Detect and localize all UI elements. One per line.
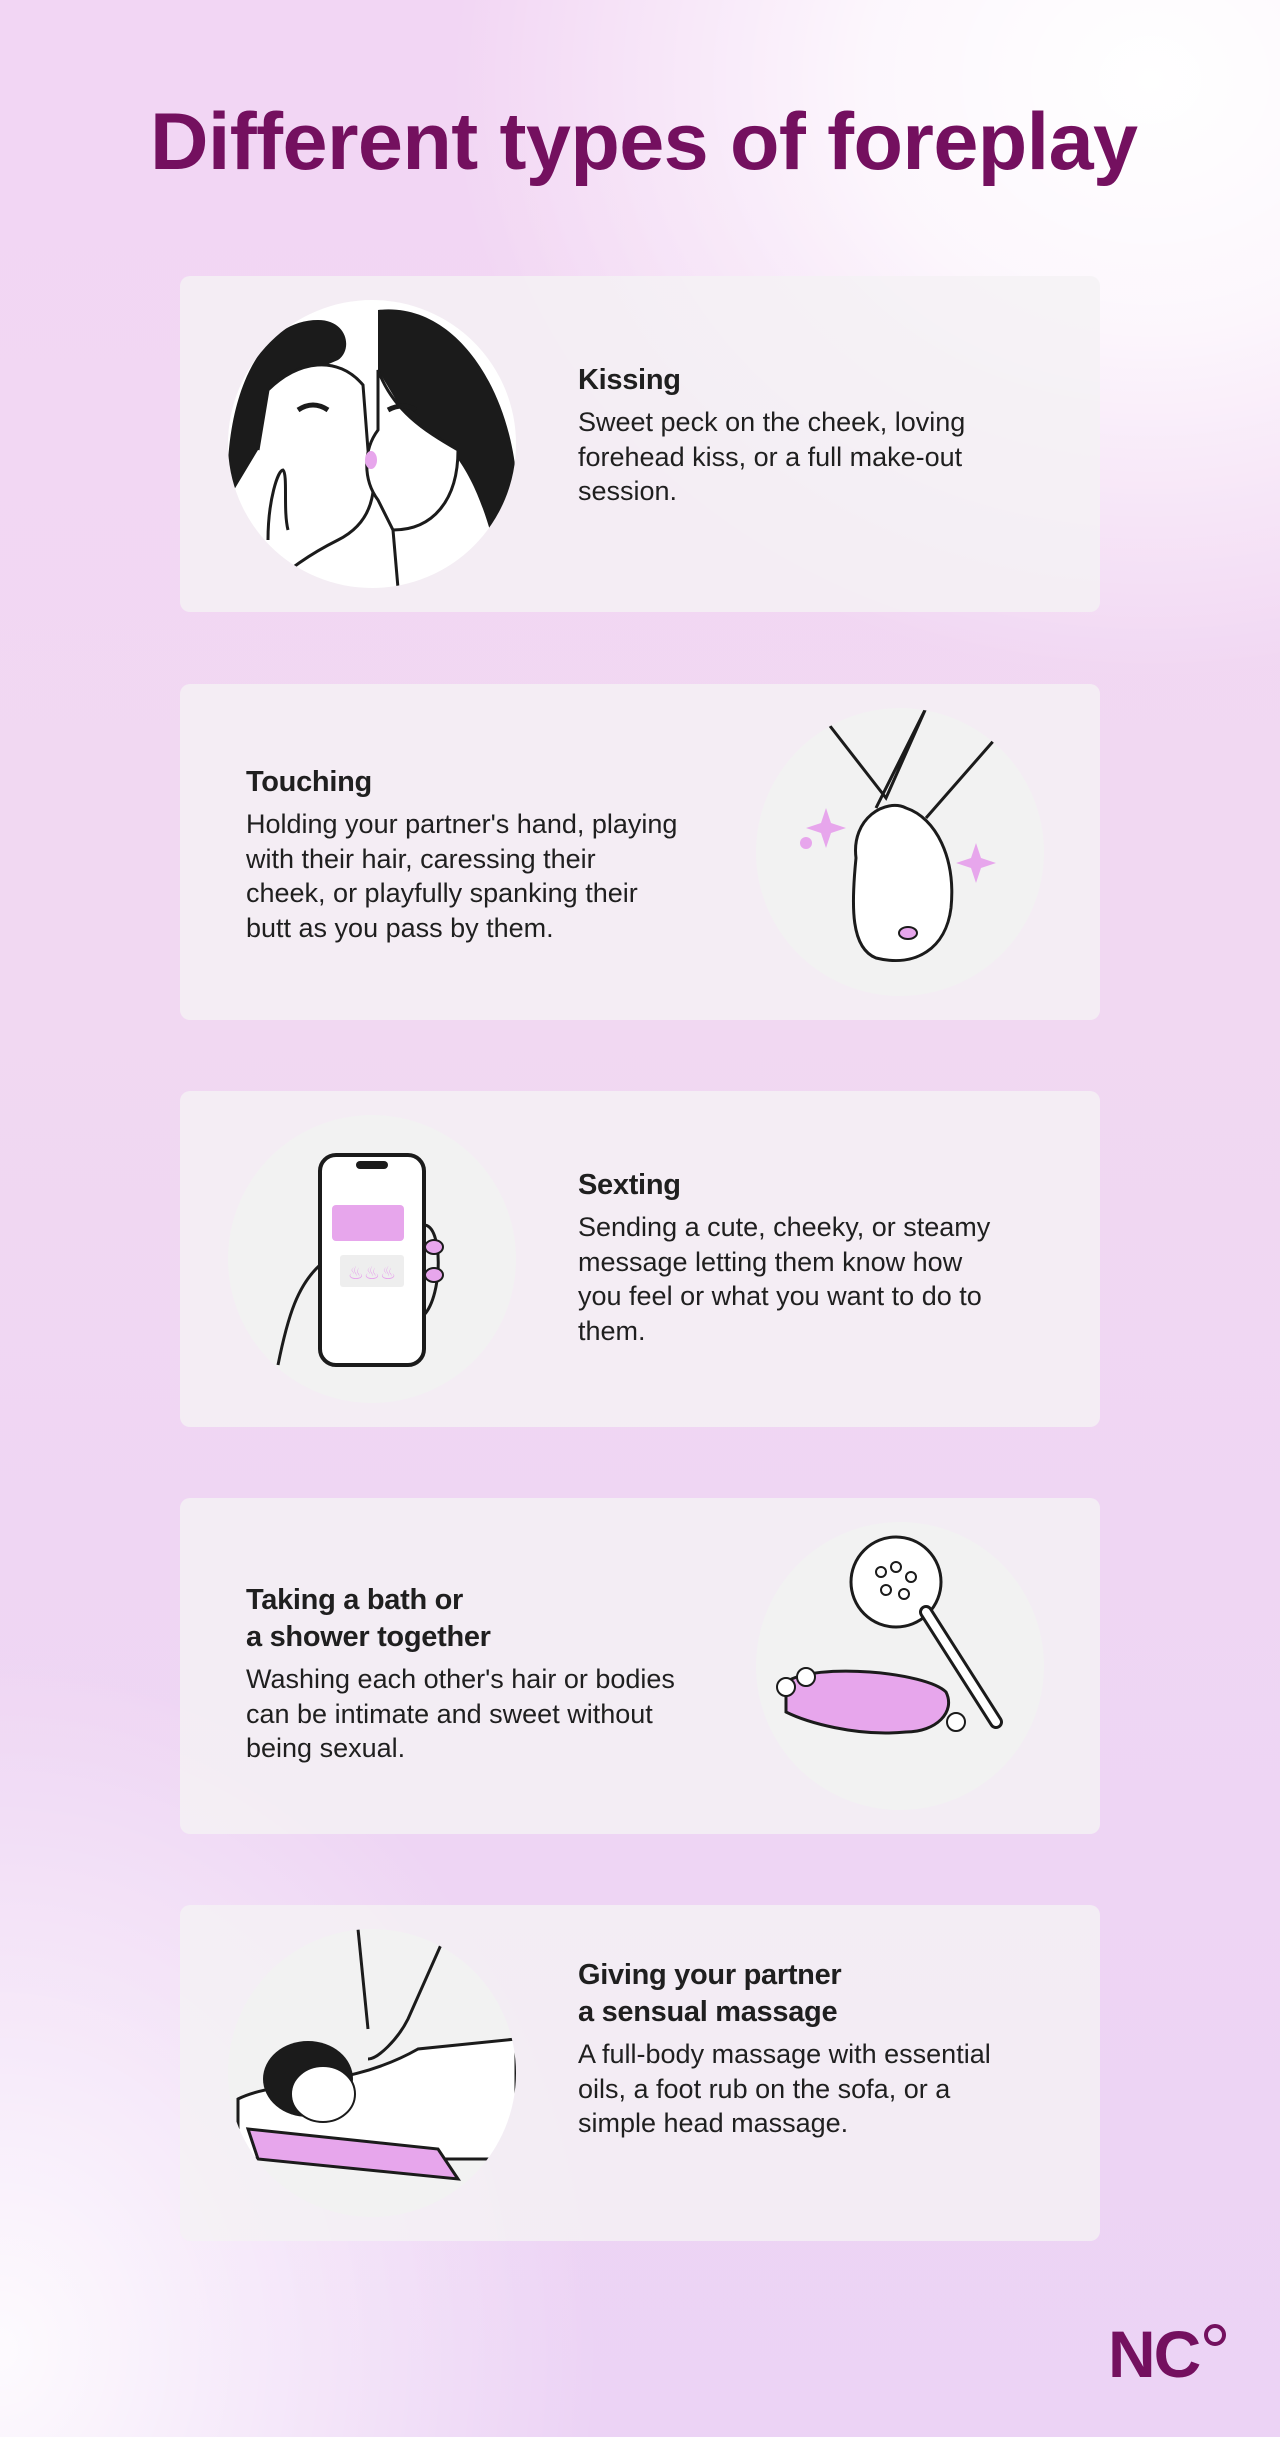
text: sexting: you feel or what you want to do to bbox=[578, 1281, 982, 1311]
text: massage: A full-body massage with essential bbox=[578, 2039, 991, 2069]
text: touching: butt as you pass by them. bbox=[246, 912, 554, 942]
text: kissing: Sweet peck on the cheek, loving bbox=[578, 407, 965, 437]
text: massage bbox=[578, 1959, 991, 2138]
panel: bath bbox=[180, 1498, 1100, 1834]
logo: NC bbox=[1108, 2317, 1199, 2391]
text: touching: Touching bbox=[246, 766, 372, 798]
text: sexting: Sexting bbox=[578, 1169, 681, 1201]
panel: massage bbox=[180, 1905, 1100, 2241]
title: Different types of foreplay bbox=[150, 97, 1137, 187]
text: bath: Washing each other's hair or bodies bbox=[246, 1664, 675, 1694]
panel: touching bbox=[180, 684, 1100, 1020]
text: bath: Taking a bath or bbox=[246, 1584, 463, 1616]
text: kissing: forehead kiss, or a full make-out bbox=[578, 442, 962, 472]
text: massage: oils, a foot rub on the sofa, or a bbox=[578, 2074, 950, 2104]
icon: phone: ♨♨♨ bbox=[348, 1263, 396, 1283]
icon: massage bbox=[228, 1929, 516, 2217]
text: touching bbox=[246, 766, 677, 942]
icon: shower and soap bbox=[756, 1522, 1044, 1810]
panel: sexting bbox=[180, 1091, 1100, 1427]
icon: phone bbox=[228, 1115, 516, 1403]
text: touching: with their hair, caressing their bbox=[246, 844, 596, 874]
icon: holding hands bbox=[756, 708, 1044, 996]
panel: kissing bbox=[180, 276, 1100, 612]
text: sexting: Sending a cute, cheeky, or steamy bbox=[578, 1212, 990, 1242]
text: bath: being sexual. bbox=[246, 1733, 405, 1763]
text: bath: can be intimate and sweet without bbox=[246, 1698, 653, 1728]
text: massage: a sensual massage bbox=[578, 1996, 837, 2028]
text: bath bbox=[246, 1584, 675, 1763]
text: sexting: them. bbox=[578, 1316, 646, 1346]
text: kissing: session. bbox=[578, 476, 677, 506]
text: bath: a shower together bbox=[246, 1621, 491, 1653]
text: kissing: Kissing bbox=[578, 364, 681, 396]
text: touching: cheek, or playfully spanking their bbox=[246, 878, 638, 908]
text: sexting bbox=[578, 1169, 990, 1346]
text: touching: Holding your partner's hand, playing bbox=[246, 809, 677, 839]
text: sexting: message letting them know how bbox=[578, 1246, 962, 1276]
text: kissing bbox=[578, 364, 965, 506]
icon: kissing couple bbox=[228, 300, 516, 588]
text: massage: simple head massage. bbox=[578, 2108, 848, 2138]
text: massage: Giving your partner bbox=[578, 1959, 841, 1991]
